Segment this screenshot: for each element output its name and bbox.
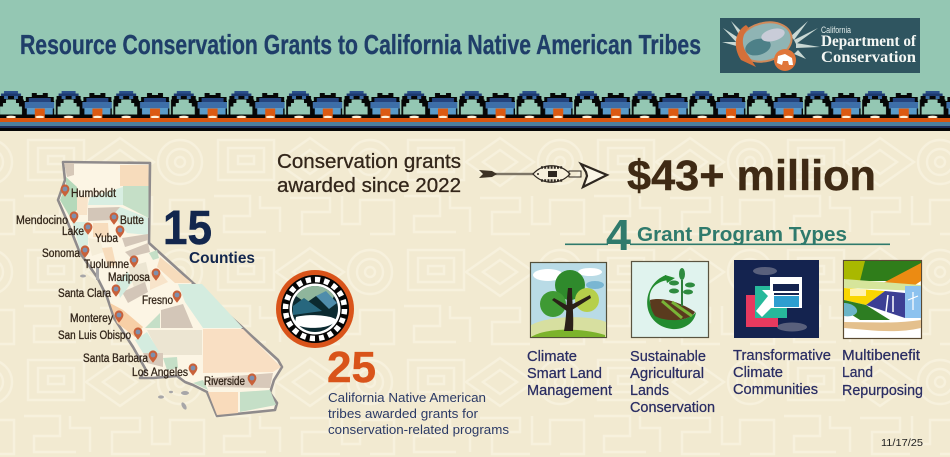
label: Sustainable [630,349,706,365]
conservation grants text [277,151,461,197]
stat: 25 tribes [327,343,510,437]
label [733,348,831,398]
label: Transformative [733,348,831,364]
heading: 4 grant program types: Grant Program Types [637,224,847,246]
label: Smart Land [527,366,602,382]
county labels: Mariposa [108,272,151,284]
conservation grants text: Conservation grants [277,151,461,173]
date stamp: 11/17/25 [881,437,923,449]
California county map [16,162,282,416]
icon: arrow and community [734,260,819,338]
woven pattern border [0,90,950,131]
state outline [58,162,282,416]
bay area and islands [80,267,189,410]
label: Agricultural [630,366,704,382]
county labels: Santa Barbara [83,353,149,365]
program: transformative climate communities [733,260,831,398]
logo: California Department of Conservation [720,17,920,73]
stat: 15 counties [163,202,255,267]
label [527,349,612,399]
icon: sprout and field [632,262,708,338]
label: Lands [630,383,669,399]
county labels: Mendocino [16,215,68,227]
stat: 25 tribes: California Native American [328,390,486,405]
label: Communities [733,382,818,398]
program: climate smart land management [527,262,612,399]
heading: 4 grant program types: 4 [606,211,632,260]
label [842,348,923,399]
icon: tribal emblem [276,270,354,348]
label: Management [527,383,612,399]
stat: 15 counties: 15 [163,202,212,255]
heading: 4 grant program types [565,211,890,260]
county labels: Sonoma [42,248,81,260]
program: multibenefit land repurposing [842,260,923,399]
icon: land use quilt [844,260,922,338]
conservation grants text: awarded since 2022 [277,175,461,197]
label: Multibenefit [842,348,920,364]
label: Land [842,365,873,381]
stat: $43+ million: $43+ million [627,152,876,200]
county labels: Butte [120,215,144,227]
county labels: Tuolumne [84,259,129,271]
logo: California Department of Conservation: Department of [821,33,917,50]
county labels: Fresno [142,295,173,307]
header band [0,0,950,92]
county labels [16,188,245,388]
label [630,349,715,416]
county labels: Yuba [95,233,119,245]
counties [60,163,281,415]
label: Climate [733,365,783,381]
program: sustainable agricultural lands conservation [630,262,715,416]
county labels: Los Angeles [132,367,188,379]
county labels: Santa Clara [58,288,112,300]
county pins [61,184,256,386]
logo: California Department of Conservation: California [821,25,851,35]
county labels: Humboldt [71,188,117,200]
county labels: Monterey [70,313,113,325]
icon: tree [530,262,606,338]
label: Climate [527,349,577,365]
label: Repurposing [842,383,923,399]
logo: California Department of Conservation: Conservation [821,49,916,66]
county labels: Riverside [204,376,245,388]
county labels: San Luis Obispo [58,330,131,342]
stat: 25 tribes: tribes awarded grants for [328,406,479,421]
stat: 15 counties: Counties [189,250,255,267]
stat: 25 tribes: 25 [327,343,376,392]
icon: decorated arrow [479,164,607,187]
label: Conservation [630,400,715,416]
county labels: Lake [62,226,84,238]
stat: 25 tribes: conservation-related programs [328,422,510,437]
page background [0,131,950,457]
title: Resource Conservation Grants to California Native American Tribes [20,29,701,60]
